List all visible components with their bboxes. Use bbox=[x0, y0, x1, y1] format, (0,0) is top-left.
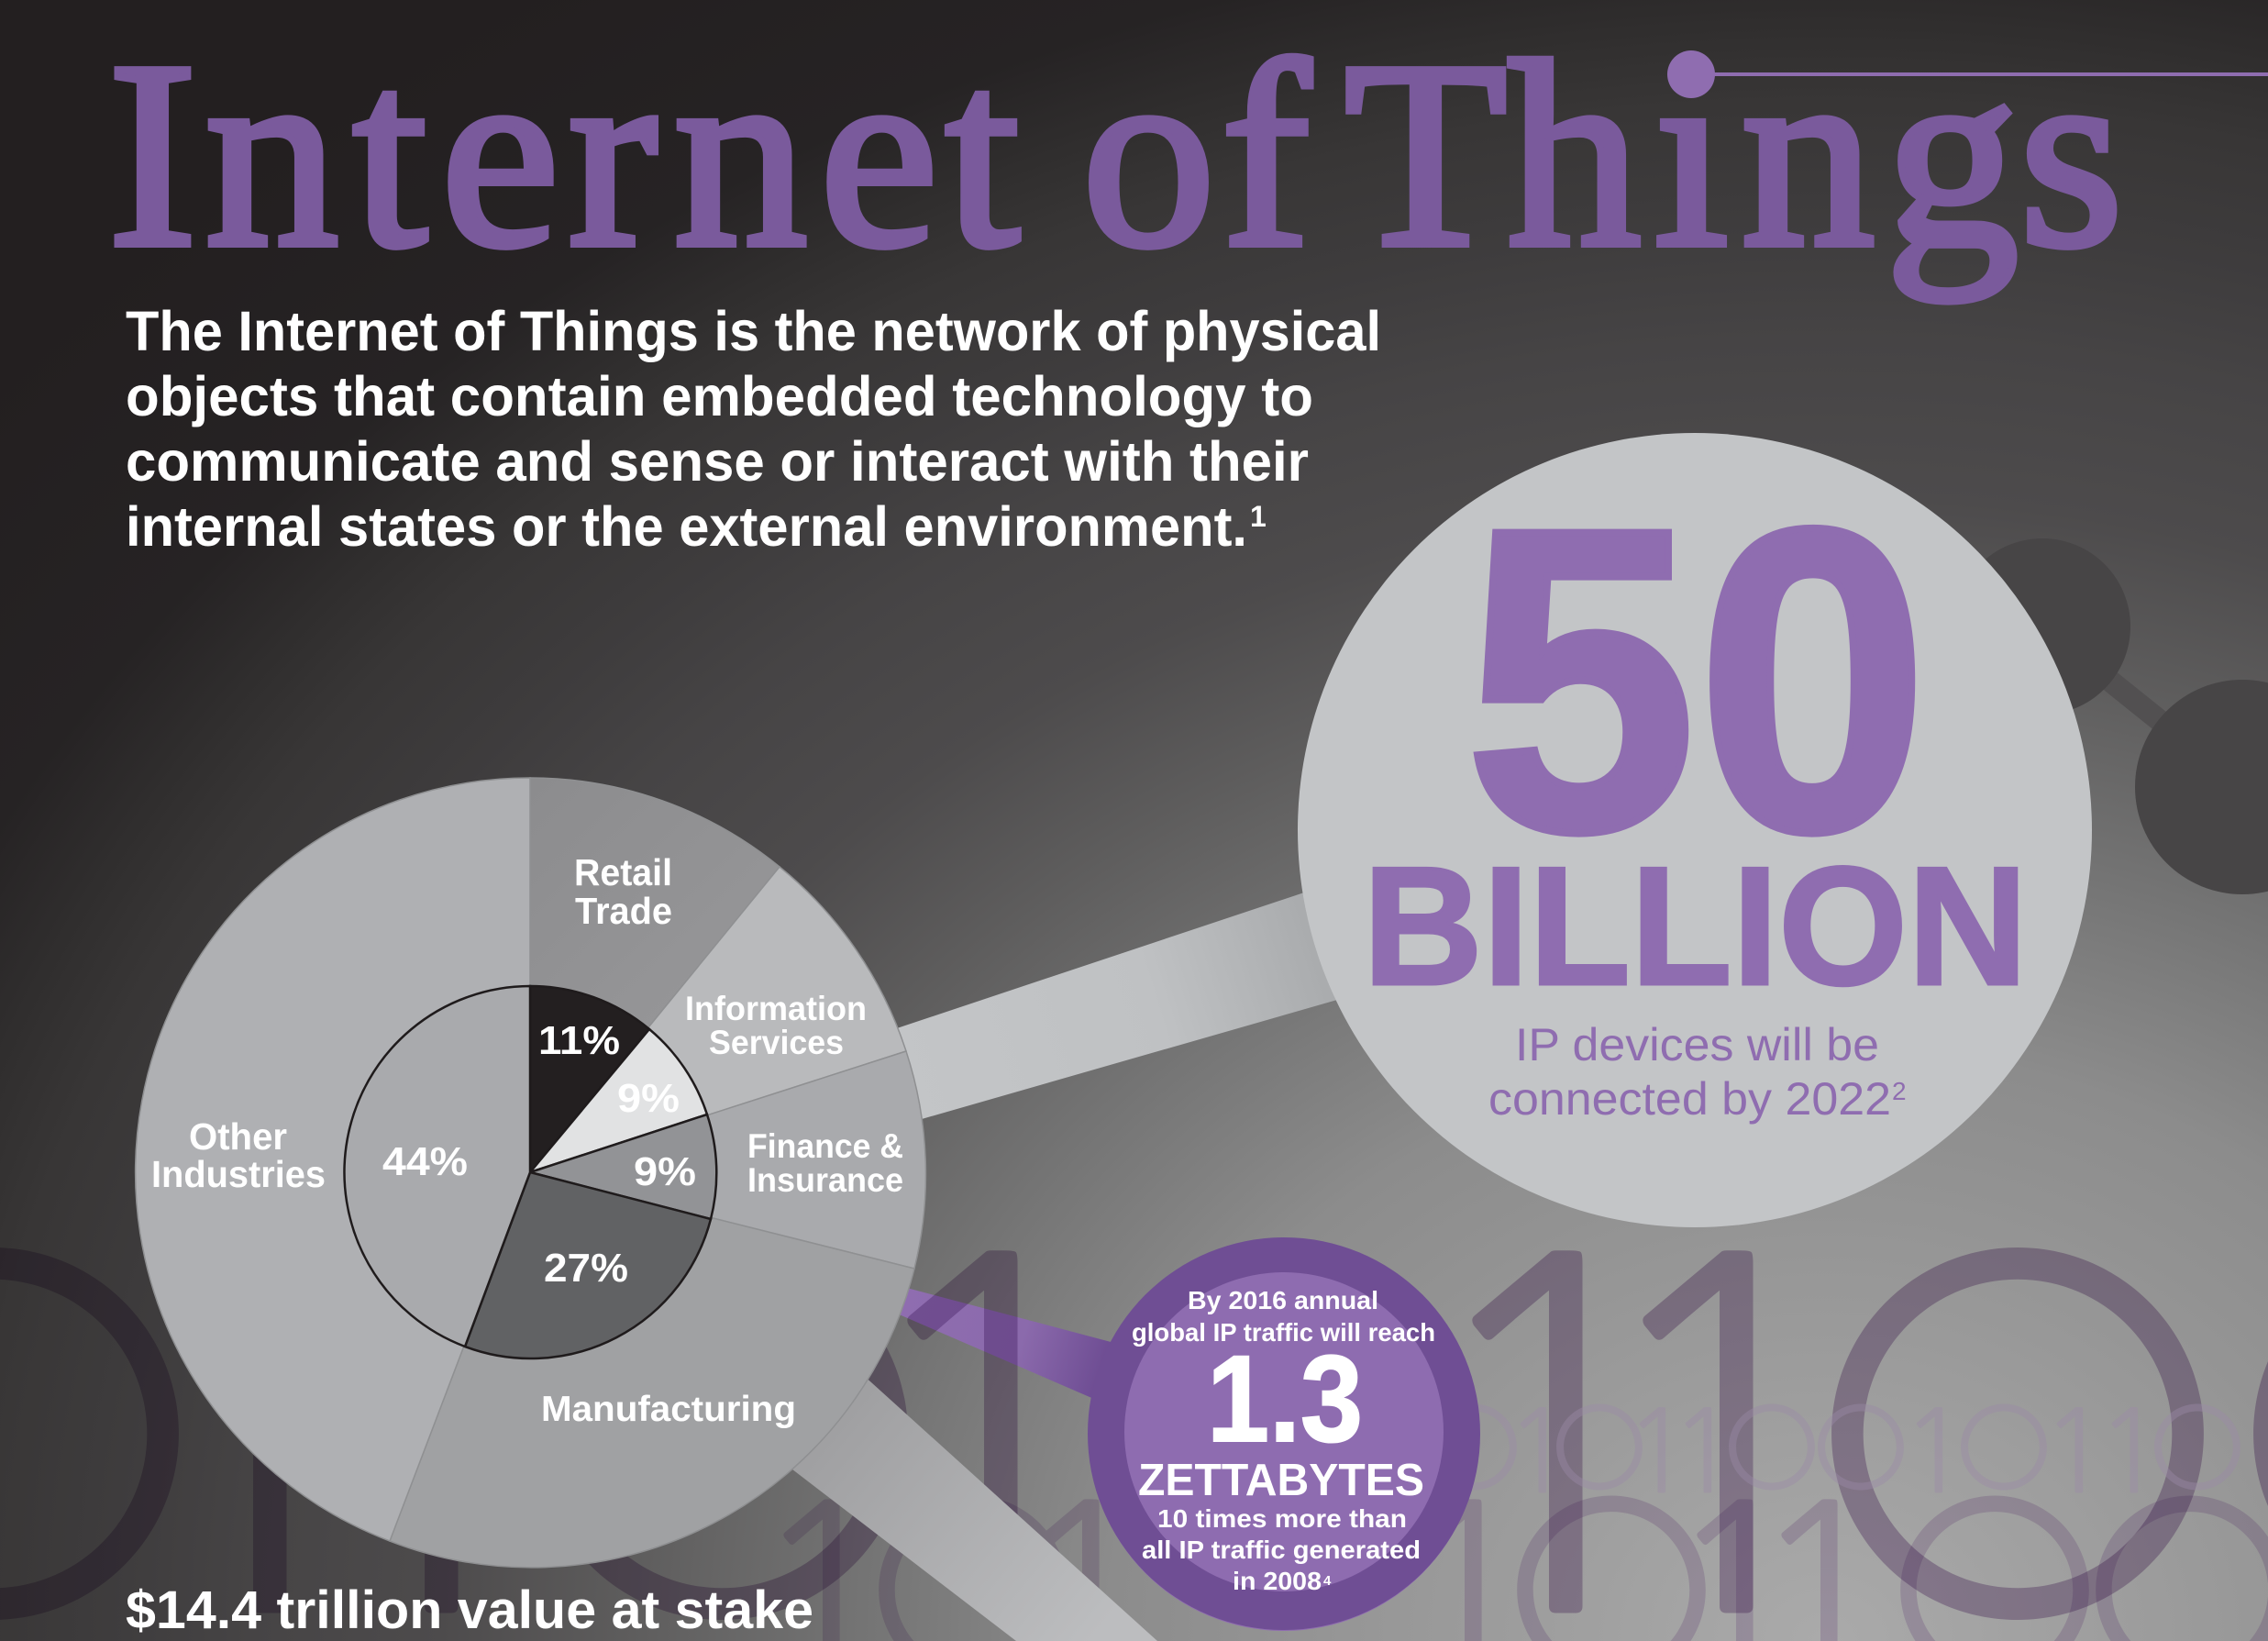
pie labels: 27% bbox=[544, 1246, 628, 1291]
big number: 50 bbox=[1465, 439, 1929, 921]
background binary digits, large row bbox=[0, 1112, 2268, 1641]
pie labels: Retail bbox=[574, 851, 672, 893]
background binary digits, small row: 〇 bbox=[1956, 1372, 2052, 1511]
pie labels: Industries bbox=[151, 1153, 326, 1195]
background binary digits, small row: 〇 bbox=[1724, 1372, 1820, 1511]
title accent: dot and line bbox=[1667, 50, 2268, 98]
pie labels: Insurance bbox=[747, 1161, 903, 1199]
connector: purple bar from pie to traffic circle bbox=[897, 1287, 1114, 1400]
connector: grey bar leaving pie to lower right bbox=[784, 1374, 1157, 1641]
title: Internet of Things bbox=[108, 7, 2123, 302]
background binary digits, small row: 1 bbox=[1900, 1394, 1970, 1509]
background binary digits, small row: 1 bbox=[2096, 1394, 2165, 1509]
intro text: The Internet of Things is the network of physical bbox=[126, 300, 1381, 362]
background binary digits, small row bbox=[1426, 1372, 2245, 1511]
pie labels: Finance & bbox=[747, 1127, 903, 1165]
caption: 2 bbox=[1892, 1077, 1907, 1105]
traffic text: By 2016 annual bbox=[1188, 1286, 1378, 1314]
pie labels: Manufacturing bbox=[541, 1390, 796, 1429]
caption: connected by 2022 bbox=[1488, 1073, 1891, 1125]
traffic text: 10 times more than bbox=[1157, 1504, 1407, 1533]
intro text: internal states or the external environment. bbox=[126, 495, 1247, 558]
outer ring: industry names bbox=[136, 778, 925, 1568]
traffic text: 4 bbox=[1323, 1573, 1332, 1589]
background binary digits, small row: 1 bbox=[1504, 1394, 1574, 1509]
intro text: objects that contain embedded technology to bbox=[126, 365, 1313, 427]
panel: 1.3 zettabytes circle bbox=[1088, 1237, 1480, 1631]
traffic text: in 2008 bbox=[1233, 1567, 1322, 1595]
pie labels: Other bbox=[189, 1115, 287, 1158]
pie chart: value at stake by industry bbox=[136, 778, 925, 1568]
background binary digits, medium row bbox=[748, 1427, 2268, 1641]
pie labels: Trade bbox=[575, 890, 672, 932]
intro text: 1 bbox=[1250, 500, 1267, 533]
value at stake caption: $14.4 trillion value at stake bbox=[126, 1580, 813, 1640]
pie labels bbox=[151, 851, 903, 1429]
panel: 50 billion circle bbox=[1298, 433, 2092, 1227]
intro text bbox=[126, 300, 1381, 558]
intro text: communicate and sense or interact with their bbox=[126, 430, 1309, 493]
traffic text: all IP traffic generated bbox=[1142, 1536, 1421, 1564]
background binary digits, small row: 〇 bbox=[1426, 1372, 1521, 1511]
background binary digits, small row: 1 bbox=[1669, 1394, 1739, 1509]
background binary digits, small row: 〇 bbox=[1813, 1372, 1908, 1511]
background binary digits, small row: 〇 bbox=[1552, 1372, 1647, 1511]
pie labels: 44% bbox=[382, 1139, 468, 1184]
background binary digits, small row: 〇 bbox=[2150, 1372, 2245, 1511]
caption: IP devices will be bbox=[1515, 1019, 1879, 1070]
background binary digits, small row: 1 bbox=[2041, 1394, 2110, 1509]
traffic text bbox=[1132, 1286, 1435, 1595]
background binary digits, small row: 1 bbox=[1623, 1394, 1693, 1509]
traffic text: ZETTABYTES bbox=[1138, 1456, 1424, 1505]
big number unit: BILLION bbox=[1363, 831, 2028, 1020]
caption bbox=[1488, 1019, 1907, 1125]
pie labels: 9% bbox=[617, 1076, 680, 1121]
icon: molecule network graphic bbox=[1954, 538, 2268, 894]
pie labels: 9% bbox=[634, 1149, 696, 1194]
inner ring: percentages bbox=[344, 986, 716, 1358]
pie labels: Information bbox=[685, 990, 867, 1027]
pie labels: Services bbox=[709, 1024, 844, 1061]
traffic text: 1.3 bbox=[1207, 1331, 1363, 1468]
traffic text: global IP traffic will reach bbox=[1132, 1318, 1435, 1347]
pie labels: 11% bbox=[538, 1018, 620, 1063]
connector: grey bar from pie to 50 billion circle bbox=[894, 887, 1344, 1119]
